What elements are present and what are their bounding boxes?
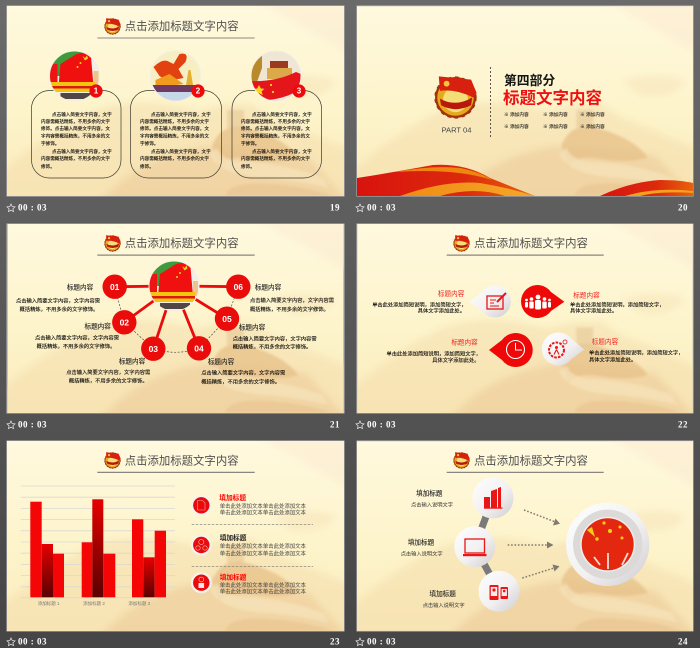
card 3: 修饰。点击输入简要文字内容，文 (241, 125, 310, 132)
label: bottom: 点击输入说明文字 (423, 601, 465, 609)
label: bottom: 填加标题 (430, 589, 456, 598)
dashed ring (115, 287, 238, 352)
label bottom left: 单击此处添加简短说明，添加简短文字， (386, 349, 481, 357)
label 05: 标题内容 (239, 322, 266, 332)
label 01: 标题内容 (67, 282, 94, 292)
label 06: 概括精炼，不用多余的文字修饰。 (250, 305, 329, 313)
card 1: 1 (94, 86, 99, 96)
card 2: 2 (196, 86, 201, 96)
card 1 (32, 51, 121, 178)
card 1: 内容需概括精炼，不用多余的文字 (41, 155, 110, 162)
slide 24 footer: 00 : 03 (367, 637, 396, 647)
label top left: 标题内容 (438, 289, 465, 298)
bubble: certificate icon (470, 286, 511, 317)
node: building icon (472, 478, 514, 518)
title: 点击添加标题文字内容 (474, 453, 588, 467)
node 01 (102, 274, 127, 299)
label 03: 点击输入简要文字内容，文字内容需 (66, 368, 150, 376)
label 02: 标题内容 (85, 322, 111, 330)
label top right (570, 290, 664, 315)
card 3: 点击输入简要文字内容，文字 (252, 148, 312, 155)
bar chart: 添加标题 2 (83, 600, 105, 607)
list item 1 (191, 493, 307, 517)
bar chart: 添加标题 1 (38, 600, 60, 607)
label bottom right: 标题内容 (592, 337, 618, 346)
label bottom left: 标题内容 (451, 338, 478, 346)
slide 19 footer: 19 (330, 202, 340, 212)
card 1: 点击输入简要文字内容，文字 (52, 148, 112, 155)
label top right: 单击此处添加简短说明，添加简短文字， (570, 300, 664, 308)
node 03 (141, 336, 166, 361)
slide 19 footer (7, 202, 340, 212)
card 2: 修饰。点击输入简要文字内容，文 (140, 125, 209, 132)
node 06: 06 (234, 282, 243, 292)
card 2: 内容需概括精炼，不用多余的文字 (140, 155, 209, 162)
slide 23 footer: 23 (330, 637, 340, 647)
list item 3: 单击此处添加文本单击此处添加文本 (220, 588, 307, 596)
dotted arrow 2 (508, 542, 554, 548)
label 06 (250, 282, 334, 313)
slide 22 footer: 00 : 03 (367, 420, 396, 430)
label: top: 填加标题 (416, 488, 443, 498)
content items: ※ 添加内容 (504, 111, 529, 118)
slide 21: radial diagram (0, 218, 351, 423)
card 3: 点击输入简要文字内容，文字 (252, 111, 312, 118)
content items: ※ 添加内容 (543, 111, 568, 118)
card 2: 字内容需概括精炼，不用多余的文 (140, 132, 209, 140)
emblem large (436, 76, 477, 117)
title: 点击添加标题文字内容 (125, 19, 239, 33)
label top left: 具体文字添加此处。 (418, 306, 465, 314)
content items: ※ 添加内容 (580, 123, 605, 130)
title (97, 18, 255, 38)
slide 20 footer: 20 (678, 202, 688, 212)
title (97, 452, 255, 473)
list item 1: 单击此处添加文本单击此处添加文本 (220, 509, 307, 517)
card 2: 点击输入简要文字内容，文字 (151, 111, 211, 118)
slide 24 footer (356, 637, 688, 647)
card 1: 点击输入简要文字内容，文字 (52, 111, 112, 118)
card 1: 修饰。点击输入简要文字内容，文 (41, 125, 110, 132)
list dividers (192, 524, 313, 567)
large flag circle (566, 503, 649, 586)
content items (504, 111, 605, 130)
slide 23 footer: 00 : 03 (18, 637, 47, 647)
node 06 (226, 274, 250, 299)
label bottom right: 单击此处添加简短说明，添加简短文字， (589, 349, 684, 357)
label top left (372, 289, 467, 314)
label bottom right: 具体文字添加此处。 (589, 355, 636, 363)
label top right: 具体文字添加此处。 (570, 307, 617, 315)
label: middle: 点击输入说明文字 (401, 549, 443, 557)
slide 19: three photo cards (0, 0, 352, 206)
title: 点击添加标题文字内容 (474, 236, 588, 250)
card 3 (232, 51, 322, 178)
label 03: 标题内容 (119, 356, 146, 366)
title (447, 452, 604, 473)
list item 2 (191, 533, 307, 557)
node 05 (215, 306, 239, 331)
dotted arrow 3 (522, 564, 560, 578)
spokes (115, 286, 238, 349)
title (97, 235, 255, 256)
card 3: 内容需概括精炼，不用多余的文字 (241, 155, 310, 162)
label 01 (16, 282, 100, 313)
list item 2: 单击此处添加文本单击此处添加文本 (220, 549, 307, 557)
list item 3: 填加标题 (220, 572, 247, 582)
slide 19 footer: 00 : 03 (18, 202, 47, 212)
list item 1: 单击此处添加文本单击此处添加文本 (220, 502, 307, 510)
slide 21 footer (7, 420, 340, 430)
list item 2: 单击此处添加文本单击此处添加文本 (220, 542, 307, 550)
card 2: 字修饰。 (140, 140, 158, 147)
label top left: 单击此处添加简短说明，添加简短文字， (372, 300, 467, 308)
slide 21 footer: 21 (330, 420, 340, 430)
card 2 (130, 51, 222, 178)
bubble: people icon (521, 285, 564, 318)
label 04: 概括精炼，不用多余的文字修饰。 (201, 378, 280, 386)
content items: ※ 添加内容 (504, 123, 529, 130)
content items: ※ 添加内容 (580, 111, 605, 118)
label 02: 概括精炼，不用多余的文字修饰。 (37, 342, 115, 350)
card 2: 内容需概括精炼，不用多余的文字 (140, 118, 209, 125)
slide 20: section divider (347, 0, 700, 206)
card 3: 字内容需概括精炼，不用多余的文 (241, 132, 310, 140)
label 03: 概括精炼，不用多余的文字修饰。 (69, 377, 148, 385)
label: top: 点击输入说明文字 (411, 500, 453, 508)
slide 24 footer: 24 (678, 637, 688, 647)
label 04: 标题内容 (208, 357, 235, 366)
slide 22 footer (356, 420, 688, 430)
slide 22 footer: 22 (678, 420, 688, 430)
slide 22: speech bubbles (347, 218, 700, 423)
bubble: clock icon (489, 333, 533, 367)
label 05: 点击输入简要文字内容，文字内容需 (233, 335, 317, 343)
slide 20 footer (356, 202, 688, 212)
label: middle (401, 538, 443, 557)
label 02 (35, 322, 119, 350)
slide 21 footer: 00 : 03 (18, 420, 47, 430)
ribbon right (600, 180, 693, 196)
node 03: 03 (149, 344, 158, 354)
card 1: 内容需概括精炼，不用多余的文字 (41, 118, 110, 125)
title: 点击添加标题文字内容 (125, 453, 239, 467)
ribbon left (357, 165, 535, 196)
label 01: 点击输入简要文字内容，文字内容需 (16, 297, 100, 305)
slide 23 footer (7, 637, 340, 647)
label 03 (66, 356, 150, 385)
label top right: 标题内容 (573, 290, 600, 300)
list item 3: 单击此处添加文本单击此处添加文本 (220, 581, 307, 589)
card 1: 修饰。 (41, 163, 55, 170)
section heading: 第四部分 (504, 73, 555, 88)
list item 3 (191, 572, 307, 596)
label 04: 点击输入简要文字内容，文字内容需 (201, 368, 285, 376)
node: phone icon (478, 571, 520, 612)
dotted arrow 1 (524, 510, 560, 526)
node 01: 01 (110, 282, 120, 292)
slide 24: flow to circle (347, 435, 700, 641)
card 2: 点击输入简要文字内容，文字 (151, 148, 211, 155)
label 06: 标题内容 (255, 282, 282, 292)
content items: ※ 添加内容 (543, 123, 568, 130)
dashed divider (490, 67, 492, 139)
connectors (475, 498, 499, 591)
section title: 标题文字内容 (503, 88, 602, 108)
slide 20 footer: 00 : 03 (367, 202, 396, 212)
part label: PART 04 (442, 126, 471, 134)
list item 2: 填加标题 (220, 533, 247, 542)
card 3: 内容需概括精炼，不用多余的文字 (241, 118, 310, 125)
title: 点击添加标题文字内容 (125, 236, 239, 250)
node 04 (187, 336, 211, 360)
card 1: 字内容需概括精炼，不用多余的文 (41, 132, 110, 140)
label 05 (233, 322, 317, 351)
card 2: 修饰。 (140, 163, 154, 170)
list item 1: 填加标题 (219, 493, 246, 502)
node: laptop icon (454, 526, 495, 567)
label: bottom (423, 589, 465, 609)
title (447, 235, 604, 256)
label 06: 点击输入简要文字内容，文字内容需 (250, 296, 334, 304)
label 01: 概括精炼，不用多余的文字修饰。 (20, 305, 98, 313)
label 05: 概括精炼，不用多余的文字修饰。 (233, 343, 311, 351)
label bottom left (386, 338, 481, 364)
label 04 (201, 357, 285, 386)
label 02: 点击输入简要文字内容，文字内容需 (35, 333, 119, 341)
label bottom right (589, 337, 684, 363)
bar chart: 添加标题 3 (128, 600, 151, 607)
node 04: 04 (194, 344, 204, 354)
slide 23: bar chart and list (0, 435, 352, 641)
node 02 (112, 310, 136, 334)
card 3: 修饰。 (241, 163, 255, 170)
bubble: gear runner icon (542, 332, 584, 366)
center photo (149, 261, 199, 311)
card 1: 字修饰。 (41, 140, 59, 147)
label: top (411, 488, 453, 508)
label: middle: 填加标题 (408, 538, 435, 546)
card 3: 字修饰。 (241, 140, 259, 147)
label bottom left: 具体文字添加此处。 (432, 356, 480, 364)
node 05: 05 (222, 314, 232, 324)
bar chart (21, 486, 175, 607)
node 02: 02 (120, 318, 129, 328)
card 3: 3 (297, 86, 302, 96)
